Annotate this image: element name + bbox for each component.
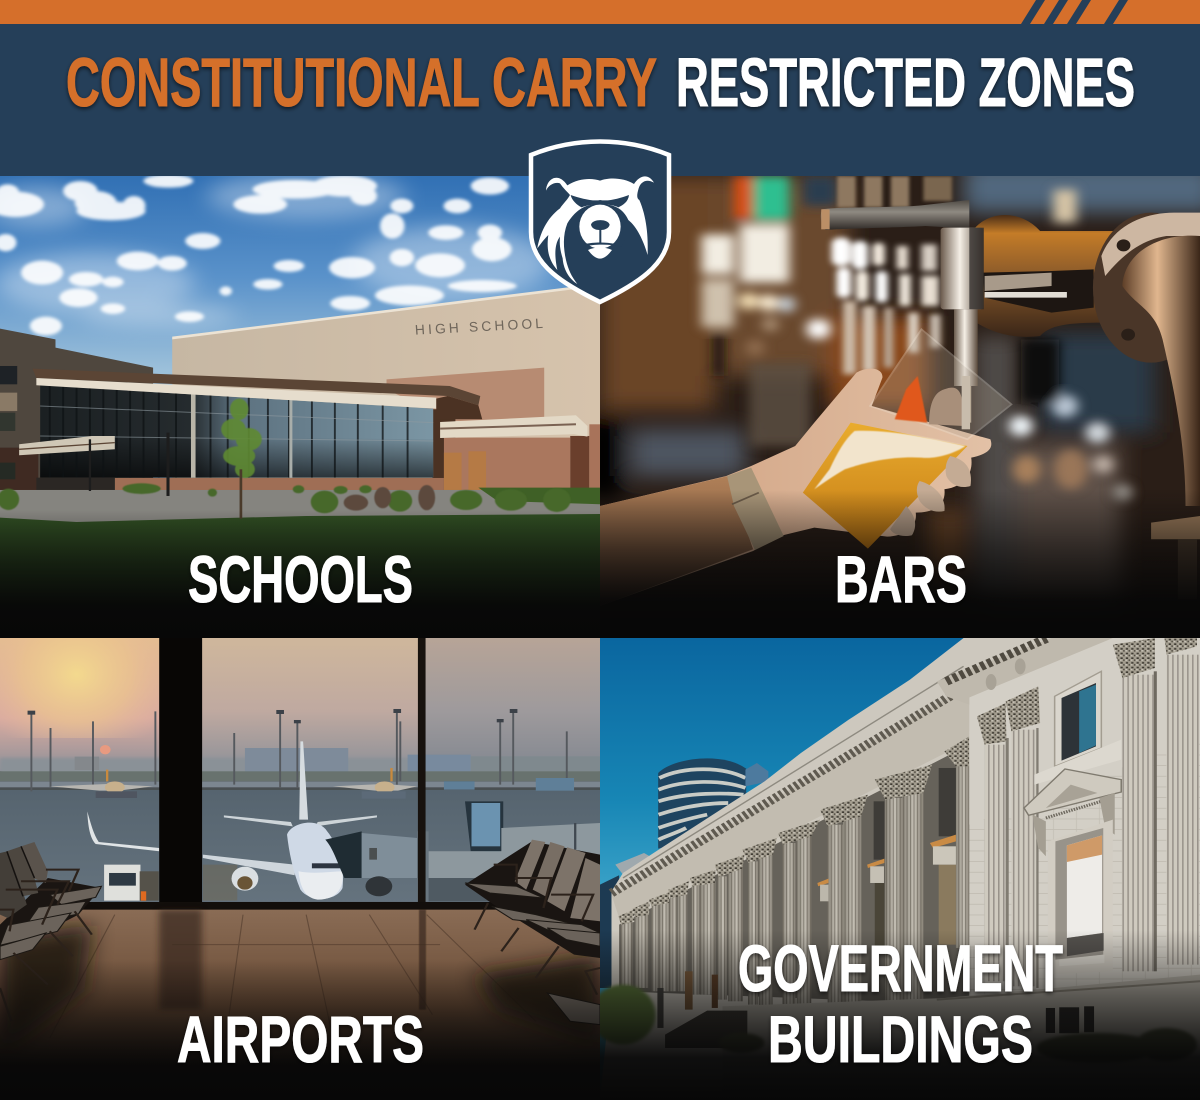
flange and copper spout <box>1093 213 1200 363</box>
pediment window <box>1024 769 1121 815</box>
tower <box>658 758 768 849</box>
title: CONSTITUTIONAL CARRY <box>66 44 657 121</box>
panel: airports <box>0 638 600 1100</box>
horizon <box>0 758 600 772</box>
service unit <box>465 801 503 851</box>
entrance: glass front <box>40 385 433 478</box>
header band <box>0 0 1200 177</box>
panel: schools <box>0 173 600 638</box>
shrubs and tree <box>0 483 571 513</box>
airliner <box>87 741 377 901</box>
recess <box>619 745 969 1005</box>
label: government buildings: BUILDINGS <box>768 1002 1033 1076</box>
ground <box>0 490 600 523</box>
upper window <box>1055 671 1101 766</box>
icon: bear head <box>537 176 654 284</box>
beer pint <box>803 423 967 549</box>
pilasters <box>985 655 1199 986</box>
label: airports: AIRPORTS <box>177 1002 424 1076</box>
label: government buildings <box>738 931 1063 1076</box>
colonnade <box>621 765 970 1006</box>
label: bars: BARS <box>835 542 967 616</box>
distant planes <box>50 768 574 799</box>
entablature <box>611 681 975 918</box>
waiting chairs right <box>465 840 600 1025</box>
ramp truck <box>104 865 140 901</box>
stone facade <box>604 638 1113 1056</box>
mid windows <box>685 768 956 1010</box>
sign: high school: HIGH SCHOOL <box>414 316 544 338</box>
floor <box>0 910 600 1054</box>
label: schools: SCHOOLS <box>188 542 413 616</box>
hand and glass <box>600 329 1011 606</box>
steps and shrubs <box>665 1011 747 1048</box>
tap handle and faucet <box>821 200 969 230</box>
panel: government buildings <box>590 638 1200 1100</box>
low brick wing <box>444 438 570 490</box>
panel: bars <box>581 163 1200 638</box>
right pipe <box>971 215 1113 337</box>
window frames <box>159 638 202 910</box>
plinth <box>723 974 1200 1007</box>
beer taps <box>837 176 952 208</box>
building wings <box>0 329 153 491</box>
waiting chairs left <box>0 842 101 1021</box>
jet bridge <box>362 833 417 878</box>
label: government buildings: GOVERNMENT <box>738 931 1063 1005</box>
floor shadows <box>0 925 600 1055</box>
logo: bear shield <box>531 142 669 302</box>
wall bay <box>969 731 1200 998</box>
capitals <box>618 736 969 925</box>
